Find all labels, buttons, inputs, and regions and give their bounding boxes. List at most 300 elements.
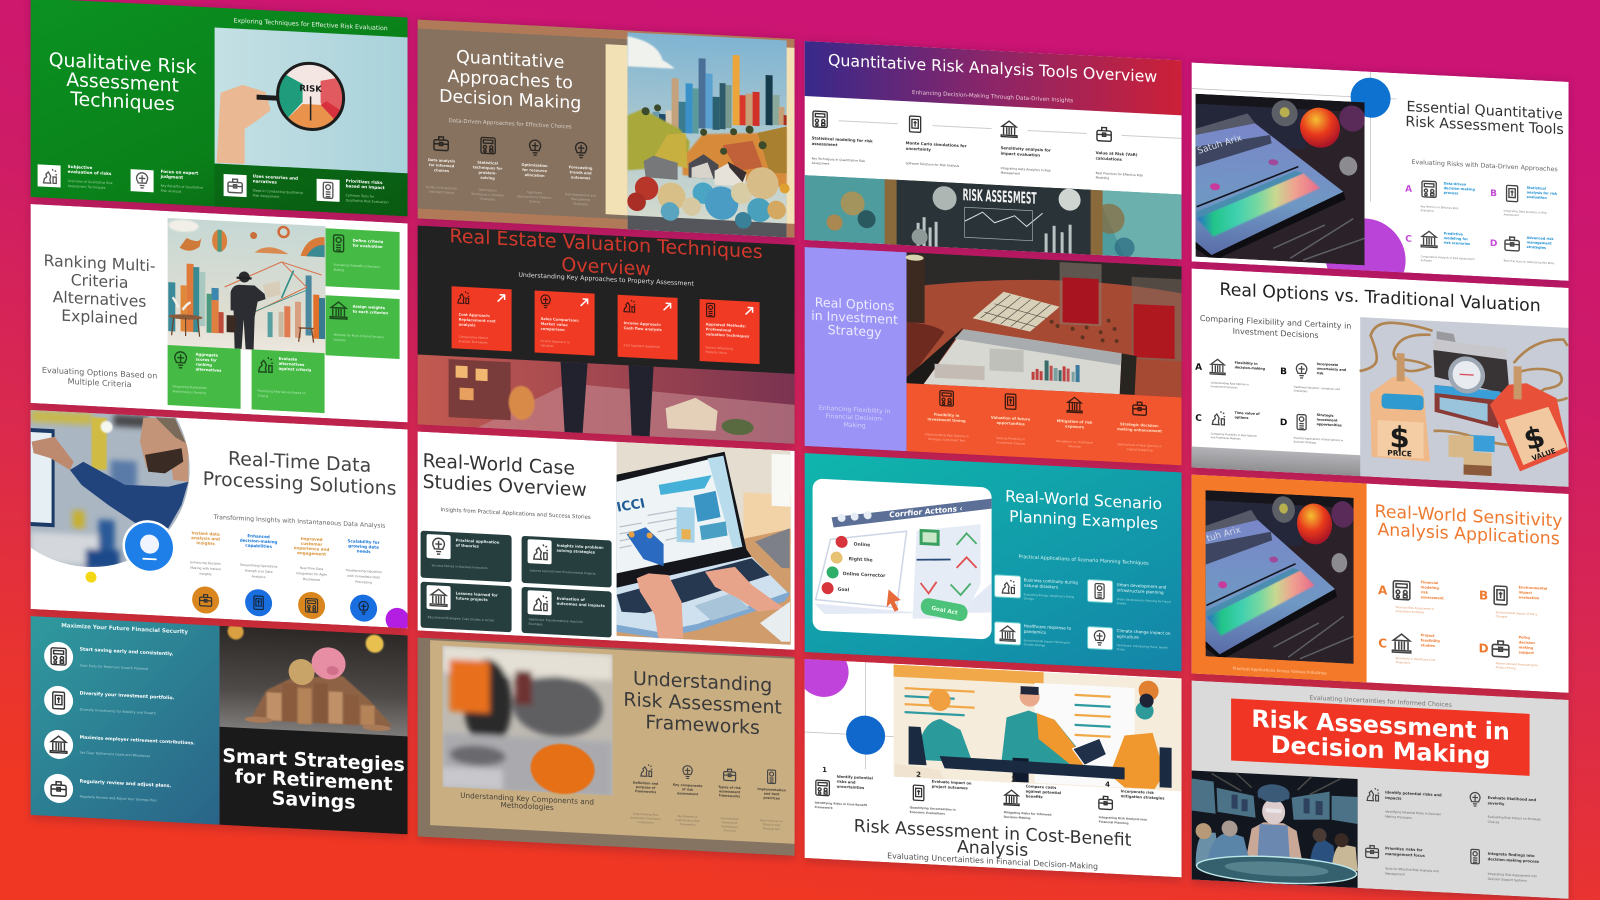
item B: Environmental — [1519, 585, 1547, 591]
item A: A — [1378, 583, 1388, 598]
card: outcomes and impacts: Healthcare Transformations: Real-Life — [529, 617, 583, 624]
item C: C — [1195, 414, 1202, 424]
tool names: Value at Risk (VaR) — [1096, 150, 1138, 157]
strategy notes: Navigation vs. Traditional — [1056, 439, 1093, 445]
card: cost approach: Analysis Techniques — [459, 339, 488, 345]
image: price and value tags: $ — [1519, 419, 1549, 457]
card: sales comparison: Valuation — [541, 343, 554, 348]
card: outcomes and impacts: Evaluation of — [557, 596, 585, 602]
list of strategies: Start saving early and consistently. — [80, 647, 174, 657]
step 4: Incorporate risk — [1121, 789, 1154, 795]
subtitle: Exploring Techniques for Effective Risk Evaluation — [233, 17, 388, 32]
approach labels: for informed — [429, 163, 455, 168]
subtitle: Insights from Practical Applications and Success Stories — [440, 507, 591, 521]
frame background — [418, 638, 795, 856]
green box: assign weights: Methods for Multi-Criteria Decision — [334, 333, 384, 339]
benefit columns: analysis and — [191, 535, 220, 542]
title: Risk Assessment Tools — [1405, 114, 1564, 138]
framework notes: Components — [637, 820, 654, 825]
title: Explained — [61, 307, 138, 329]
item A: assessment — [1421, 595, 1444, 601]
benefit columns: decision-making — [240, 538, 278, 545]
item A: decision-making — [1444, 186, 1475, 192]
card: appraisal methods: Factors Influencing — [706, 345, 733, 351]
item D: Business Strategy — [1294, 439, 1317, 445]
tool notes: Management — [1001, 171, 1021, 176]
approach notes: Strategies — [573, 202, 588, 206]
item D — [1280, 411, 1344, 446]
green box: aggregate scores: ranking — [196, 362, 212, 367]
title: Savings — [272, 787, 355, 814]
item: scenarios and narratives: narratives — [253, 178, 277, 185]
item: urban development: infrastructure planning — [1117, 588, 1164, 595]
item: identify risks: Identifying Potential Risks in Decision — [1385, 809, 1441, 816]
approach labels: techniques for — [473, 165, 503, 171]
item: climate change: Crises — [1117, 647, 1125, 652]
item: identify risks: impacts — [1385, 796, 1402, 801]
item B: Changes — [1496, 614, 1508, 619]
framework notes: Overview — [723, 828, 737, 833]
framework notes: Assessment — [722, 820, 737, 825]
item B — [1479, 583, 1547, 621]
item: subjective evaluation: Assessment Techniques — [68, 184, 106, 190]
green box: evaluate alternatives: Criteria — [258, 394, 269, 398]
approach labels — [428, 158, 593, 186]
image: checklist window: Online Corrector — [843, 571, 886, 579]
purple side panel — [805, 247, 907, 451]
image: calculator, glasses and report on table — [906, 252, 1182, 397]
green box: assign weights — [326, 295, 400, 359]
title: Real-World Sensitivity — [1375, 502, 1563, 532]
approach notes: Management — [571, 197, 591, 202]
slide background — [31, 410, 408, 628]
item: prioritize risks: Management — [1385, 871, 1406, 877]
subtitle: Investment Decisions — [1233, 327, 1319, 340]
item A: process — [1444, 191, 1458, 195]
step 4: Integrating Risk Analysis into — [1099, 815, 1147, 822]
subtitle: Practical Applications of Scenario Planning Techniques — [1019, 554, 1149, 567]
card: cost approach: Replacement cost — [459, 318, 496, 324]
item B: Traditional Valuation: Limitations and — [1294, 385, 1340, 391]
approach labels: choices — [434, 168, 449, 173]
item B: B — [1490, 189, 1497, 199]
step 2: project outcomes — [932, 785, 969, 790]
panel: Essential Quantitative Risk Assessment Tools — [1192, 62, 1569, 309]
tool notes: Key Techniques in Quantitative Risk — [812, 156, 865, 163]
item B: Statistical — [1527, 186, 1546, 191]
title: Real Options vs. Traditional Valuation — [1219, 280, 1541, 316]
title: Studies Overview — [423, 472, 587, 501]
card: practical application: Practical application — [456, 537, 500, 545]
taupe panel — [418, 28, 628, 219]
green box: assign weights: Analysis — [334, 338, 346, 342]
title: Analysis — [957, 837, 1028, 861]
item D — [1479, 633, 1539, 671]
step 1: risks and — [837, 780, 856, 785]
card: sales comparison: comparison — [541, 327, 565, 332]
panel: Real-World Case Studies Overview — [418, 432, 795, 650]
title: Real-World Case — [423, 451, 575, 480]
approach labels: problem- — [478, 171, 497, 176]
approach notes: Informed Choices — [429, 190, 455, 195]
item D: making — [1519, 645, 1534, 650]
title: in Investment — [811, 308, 898, 327]
title: Frameworks — [645, 711, 760, 739]
framework notes — [630, 811, 784, 835]
image: price and value tags: PRICE — [1387, 448, 1412, 459]
grid lines — [1192, 62, 1397, 203]
item B: B — [1280, 367, 1287, 377]
approach labels: allocation — [525, 173, 545, 178]
strategy labels: Strategic decision- — [1120, 422, 1160, 428]
benefit descriptions: Real-Time Data — [300, 566, 323, 571]
strategy notes — [925, 432, 1162, 453]
item: urban development — [1088, 580, 1171, 608]
item: healthcare response: Climate Change — [1024, 642, 1045, 647]
grey bottom strip — [1192, 446, 1362, 476]
item: prioritize risks: Prioritize risks for — [1385, 846, 1423, 852]
item C: Predictive — [1444, 231, 1464, 237]
item: scenarios and narratives: Risk Assessment — [253, 193, 280, 199]
image: risk assessment chalkboard — [805, 175, 1182, 260]
item: integrate findings — [1471, 849, 1540, 883]
panel: Smart Strategies for Retirement Savings — [31, 613, 408, 834]
strategy notes: Applications of Real Options in — [1118, 442, 1162, 448]
panel: Quantitative Approaches to Decision Making — [418, 20, 795, 238]
item: evaluate likelihood: severity — [1488, 801, 1505, 806]
panel: Understanding Risk Assessment Frameworks — [418, 638, 795, 856]
item A: risk — [1421, 590, 1429, 595]
slide background — [31, 0, 408, 216]
tool notes: Modeling — [1096, 175, 1109, 180]
benefit descriptions: Making with Instant — [190, 566, 222, 571]
approach labels: for resource — [522, 168, 548, 173]
card: lessons learned: future projects — [456, 595, 488, 602]
image: checklist window: Online — [854, 542, 870, 548]
step 4: 4 — [1105, 780, 1110, 789]
panel: Risk Assessment in Cost-Benefit Analysis — [797, 644, 1182, 877]
title: Criteria — [71, 271, 128, 292]
item A: Financial — [1421, 580, 1438, 585]
framework labels: purpose of — [636, 785, 656, 790]
item: integrate findings: decision-making process — [1488, 857, 1540, 864]
framework labels: practices — [763, 796, 780, 801]
icon: blue globe badge — [122, 520, 173, 571]
image: checklist window — [813, 478, 992, 640]
framework labels: and best — [764, 792, 780, 796]
decorative purple circle — [1326, 216, 1406, 301]
item A: Financial Risk Assessment in — [1396, 605, 1434, 611]
approach notes: Optimization — [478, 188, 497, 193]
tool names: uncertainty — [906, 146, 931, 152]
framework labels: Types of risk — [718, 785, 742, 790]
step 4 — [1099, 780, 1165, 827]
item C — [1405, 230, 1475, 265]
item A: Investment Portfolios — [1396, 609, 1425, 615]
title: Decision Making — [439, 87, 581, 114]
list of strategies: Diversify your investment portfolio. — [80, 691, 175, 701]
card: outcomes and impacts: Examples — [529, 622, 543, 626]
title: Quantitative — [456, 47, 564, 73]
card: cost approach: Cost Approach: — [459, 313, 491, 318]
framework labels: assessment — [677, 791, 699, 796]
teal background — [31, 616, 220, 825]
item: business continuity: Business continuity during — [1024, 577, 1078, 585]
tan panel — [430, 640, 795, 844]
list of strategies: Set Clear Retirement Goals and Milestones — [80, 751, 150, 758]
framework labels: assessment — [719, 789, 741, 794]
tool notes — [812, 156, 1143, 182]
list of strategies: Maximize employer retirement contributions. — [80, 735, 195, 746]
card: problem-solving insights: solving strategies — [557, 548, 596, 555]
item C: modeling for — [1444, 236, 1468, 241]
cream strip — [606, 44, 628, 215]
item D: investment — [1317, 418, 1338, 423]
tool notes: Assessment — [812, 161, 830, 166]
item A: Flexibility in — [1235, 361, 1258, 366]
card: sales comparison: Sales Comparison: — [541, 317, 580, 323]
green box: aggregate scores: Preferences in Ranking — [173, 389, 206, 395]
green box: define criteria — [326, 228, 400, 290]
item C — [1195, 409, 1260, 442]
card: cost approach: analysis — [459, 323, 476, 328]
slide background — [418, 20, 795, 238]
panel: Qualitative Risk Assessment Techniques — [31, 0, 408, 216]
strategy labels: Flexibility in — [934, 413, 960, 418]
icons row — [641, 763, 776, 784]
benefit columns: capabilities — [245, 543, 272, 549]
item D: management — [1527, 240, 1552, 246]
framework labels: of risk — [682, 787, 694, 792]
item: evaluate likelihood — [1470, 792, 1542, 827]
step 2: Quantifying Uncertainties in — [910, 805, 956, 812]
item C — [1378, 631, 1441, 666]
item B — [1490, 184, 1558, 219]
title: Approaches to — [447, 67, 573, 93]
icons row — [434, 135, 587, 159]
step 3 — [1004, 775, 1061, 822]
strategy labels — [928, 412, 1162, 433]
item: integrate findings: Integrating Risk Assessment into — [1488, 872, 1537, 878]
item: evaluate likelihood: Evaluate likelihood and — [1488, 796, 1537, 802]
item B: uncertainty and — [1317, 367, 1347, 372]
item: evaluate likelihood: Evaluating Risk Impact on Strategic — [1488, 815, 1542, 822]
card: problem-solving insights — [522, 536, 612, 587]
title: Risk Assessment — [623, 689, 782, 719]
framework notes: Assessment Framework — [630, 815, 661, 821]
item: prioritizes risks — [317, 177, 388, 204]
item C: and Traditional Methods — [1211, 435, 1241, 441]
green box: assign weights: to each criterion — [353, 309, 388, 315]
panel: Real-Time Data Processing Solutions — [30, 410, 408, 628]
strategy notes: Valuation — [1068, 444, 1081, 449]
panel: Real-World Sensitivity Analysis Applications — [1192, 474, 1569, 693]
title: Essential Quantitative — [1406, 99, 1563, 123]
item A: decision-making — [1235, 365, 1266, 371]
item: business continuity: Evaluating Energy: Adapting to Rising — [1024, 592, 1075, 599]
item A: Data-driven — [1444, 181, 1467, 187]
header band — [805, 41, 1182, 115]
framework notes: Implementing Risk — [675, 818, 700, 823]
item C: Projections — [1396, 660, 1411, 665]
item D: D — [1479, 641, 1489, 656]
framework notes: Management — [763, 826, 780, 831]
card: income approach — [618, 295, 678, 360]
image: engineer in circular crop — [30, 410, 190, 567]
strategy notes: Valuing Flexibility in — [996, 436, 1025, 441]
strategy labels: opportunities — [997, 421, 1025, 426]
panel: Real-World Scenario Planning Examples — [805, 453, 1182, 671]
benefit descriptions: Insights — [200, 572, 212, 576]
framework labels: Key components — [673, 783, 703, 788]
subtitle: Evaluating Uncertainties for Informed Choices — [1309, 695, 1452, 709]
image: magnifier over risk gauge: RISK — [299, 84, 322, 95]
list of strategies: Start Early for Maximum Growth Potential — [80, 664, 148, 671]
orange side panel — [1192, 474, 1367, 683]
subtitle: Methodologies — [500, 800, 554, 812]
item C: C — [1378, 636, 1387, 651]
item C: feasibility — [1421, 638, 1441, 643]
orange strip — [907, 383, 1182, 465]
image: tablet with colored chart — [1196, 94, 1365, 268]
list of strategies: Regularly review and adjust plans. — [80, 779, 172, 789]
image: man looking at charts — [168, 218, 326, 354]
panel: Ranking Multi-Criteria Alternatives Explained — [31, 204, 408, 422]
item: healthcare response: Environmental Impact Planning for — [1024, 638, 1071, 645]
benefit descriptions: Streamlining Operations — [240, 563, 278, 569]
approach labels: Forecasting — [569, 165, 593, 171]
item: evaluate likelihood: Choices — [1488, 820, 1500, 824]
image: checklist window: Corrfior Acttons ‹ — [889, 504, 963, 519]
title: Real Options — [815, 295, 894, 314]
item: climate change — [1088, 627, 1171, 654]
tool notes: Software Solutions for Risk Analysis — [906, 161, 960, 168]
image: checklist window: Right the — [849, 556, 873, 564]
image: piggy banks on coins — [220, 623, 408, 739]
benefit columns: customer — [301, 541, 322, 547]
title: Processing Solutions — [203, 468, 396, 500]
title: Understanding — [633, 668, 772, 697]
item: identify risks — [1367, 788, 1442, 821]
card: problem-solving insights: Lessons Learned from Environmental Projects — [530, 568, 596, 576]
subtitle: Transforming Insights with Instantaneous Data Analysis — [213, 514, 385, 530]
item: prioritize risks: Tools for Effective Risk Analysis and — [1384, 866, 1439, 873]
card: appraisal methods: Property Value — [706, 350, 727, 355]
card: sales comparison: Market value — [541, 322, 568, 327]
approach labels: solving — [480, 176, 495, 181]
item: healthcare response — [995, 622, 1072, 649]
green box: define criteria: Evaluating Tradeoffs in Decision — [334, 263, 380, 269]
item D: Best Practices for Addressing Key Risks — [1504, 259, 1555, 265]
item: business continuity: Change — [1024, 596, 1034, 601]
item D: Practical Applications of Real Options in — [1294, 436, 1344, 442]
item C: C — [1405, 235, 1412, 245]
tool names: impact evaluation — [1001, 151, 1040, 158]
strategy labels: investment timing — [928, 417, 966, 423]
item D: D — [1490, 239, 1497, 249]
item: climate change: Healthcare: Anticipating Public Health — [1117, 643, 1168, 650]
benefit descriptions: Processing — [355, 580, 372, 585]
item: expert judgment — [130, 169, 203, 194]
benefit descriptions: Integration for Agile — [296, 571, 327, 577]
benefit columns: growing data — [348, 543, 379, 550]
green box: define criteria: Making — [334, 268, 344, 272]
title: Risk Assessment in — [1251, 705, 1510, 746]
item D: Policy — [1519, 635, 1531, 640]
benefit descriptions: Analytics — [252, 574, 266, 579]
subtitle: Comparing Flexibility and Certainty in — [1200, 314, 1351, 331]
item A: Investment Decisions — [1211, 384, 1238, 390]
item A: modeling — [1421, 585, 1439, 590]
item: climate change: Climate change impact on — [1117, 628, 1171, 636]
decorative blue circle — [846, 715, 885, 756]
framework labels: Definition and — [633, 781, 659, 786]
item C: Comparative Analysis of Risk Assessment — [1421, 254, 1475, 261]
slide background — [805, 659, 1182, 877]
green box: evaluate alternatives: against criteria — [279, 366, 312, 372]
item: business continuity: natural disasters — [1024, 583, 1058, 590]
item: scenarios and narratives — [224, 174, 303, 198]
approach notes: Approaches to Problem- — [517, 194, 552, 200]
item: subjective evaluation — [38, 162, 113, 190]
item D: Advanced risk — [1527, 236, 1554, 241]
slide background — [1192, 268, 1569, 487]
approach notes — [426, 185, 596, 207]
image: woman with helmet and holographic table — [1192, 770, 1358, 888]
approach labels: Statistical — [477, 161, 498, 166]
item D: D — [1280, 418, 1287, 428]
tool names: calculations — [1096, 155, 1123, 162]
panel: Quantitative Risk Analysis Tools Overview — [805, 41, 1182, 260]
title: Ranking Multi- — [44, 252, 156, 275]
card: sales comparison: Income Approach to — [541, 339, 570, 344]
item: subjective evaluation: evaluation of risks — [68, 169, 112, 176]
subtitle: Evaluating Options Based on — [42, 366, 157, 381]
item C: risk scenarios — [1444, 241, 1470, 246]
benefit columns: experience and — [294, 545, 329, 552]
card: lessons learned — [421, 582, 512, 632]
card: lessons learned: Lessons learned for — [456, 590, 498, 598]
red title box — [1231, 699, 1530, 776]
framework notes: Understanding Risk — [633, 812, 659, 817]
green box: define criteria: for evaluation — [353, 243, 383, 249]
item A — [1378, 578, 1444, 616]
subtitle: Evaluating Risks with Data-Driven Approaches — [1412, 159, 1558, 173]
card: appraisal methods: Appraisal Methods: — [706, 322, 746, 328]
item: expert judgment: Key Benefits of Qualitative — [161, 184, 203, 190]
card: appraisal methods — [700, 299, 760, 364]
step 4: mitigation strategies — [1121, 794, 1165, 801]
item: subjective evaluation: Overview of Qualitative Risk — [68, 179, 113, 185]
green box: evaluate alternatives: Prioritizing Alternatives Based on — [258, 389, 306, 395]
item A: Evaluation — [1421, 208, 1435, 213]
framework notes: Frameworks — [680, 822, 696, 827]
title: Real-Time Data — [228, 448, 371, 477]
slide background — [418, 432, 795, 650]
title: Qualitative Risk — [49, 50, 197, 79]
step 4: Financial Planning — [1099, 820, 1129, 825]
list of strategies: Regularly Review and Adjust Your Savings Plan — [80, 795, 157, 802]
card: problem-solving insights: Insights into problem- — [557, 543, 605, 550]
item B: risk — [1317, 371, 1324, 376]
green box: evaluate alternatives: Evaluate — [279, 356, 298, 362]
item D: decision — [1519, 640, 1535, 645]
subtitle: Evaluating Uncertainties in Financial Decision-Making — [887, 851, 1098, 871]
benefit descriptions: Transforming Industries — [344, 568, 382, 574]
card: lessons learned: Educational Strategies: Case Studies in Action — [428, 615, 495, 622]
step 3: against potential — [1026, 789, 1061, 795]
step 2: Economic Evaluations — [910, 810, 945, 816]
